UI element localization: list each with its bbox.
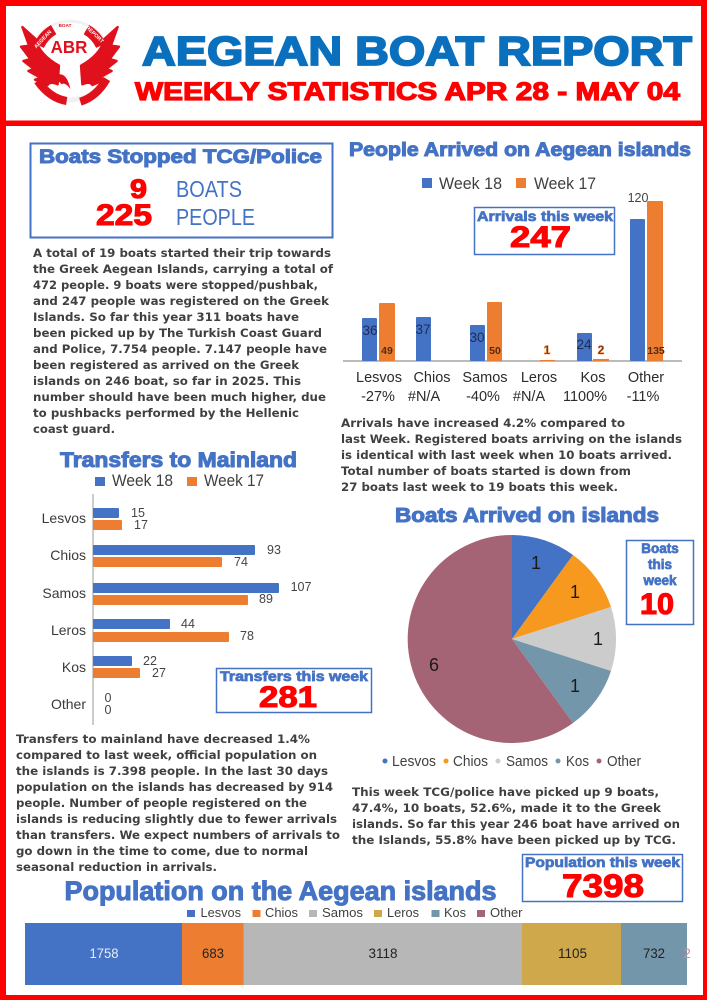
text block: boats commentary [352,785,680,847]
bars: Other: 0 [105,691,112,705]
text block: transfers commentary: go down in the time to come, due to normal [16,844,308,858]
bars: Samos: 107 [291,580,311,594]
bars: Kos: 24 [576,337,592,352]
bars: Samos: 30 [469,330,485,345]
icon: ABR eagle logo: REPORT [84,25,105,45]
bars: Samos: Samos [42,585,86,601]
axis labels: percent change: -27% [361,389,395,405]
callout: arrivals this week: 247 [510,221,571,254]
bars: Chios: 93 [267,543,281,557]
text block: trip summary [33,246,334,436]
bars: Lesvos: 17 [134,518,148,532]
stacked bar: population: 1758 [90,945,119,961]
bars: Other [51,691,112,717]
axis labels: percent change: #N/A [408,389,440,405]
axis labels: percent change [361,389,659,405]
callout: transfers this week: 281 [259,681,317,714]
legend: pie: Samos [506,754,548,770]
stacked bar: population: 1105 [558,945,587,961]
text block: trip summary: been registered as arrived on the Greek [33,358,299,372]
callout: boats this week: week [642,573,677,588]
callout: boats this week: 10 [640,588,674,621]
bars: Lesvos: 15 [131,506,145,520]
stacked bar: population: 732 [643,945,665,961]
legend: pie: Other [607,754,641,770]
stat: boats [130,174,242,204]
text block: arrivals commentary: is identical with last week when 10 boats arrived. [341,448,672,462]
callout: transfers this week [216,668,372,714]
text block: trip summary: and 247 people was registered on the Greek [33,294,329,308]
text block: boats commentary: This week TCG/police have picked up 9 boats, [352,785,659,799]
heading: people arrived: People Arrived on Aegean islands [349,140,691,161]
stacked bar: population: 2 [683,945,691,961]
subtitle: WEEKLY STATISTICS APR 28 - MAY 04 [135,78,680,106]
text block: trip summary: to pushbacks performed by the Hellenic [33,406,299,420]
text block: trip summary: A total of 19 boats started their trip towards [33,246,331,260]
callout: population this week [522,854,682,904]
legend: pie: Lesvos [392,754,436,770]
legend: arrivals [422,174,596,193]
bars: Chios: Chios [50,547,86,563]
header [21,20,692,106]
bars: Other [628,191,665,361]
slice values: 1 [570,582,580,602]
callout: transfers this week: Transfers this week [220,669,369,684]
callout: arrivals this week [474,208,614,254]
bars: Leros: 78 [240,629,254,643]
bars: Lesvos: 49 [381,345,393,357]
text block: transfers commentary: Transfers to mainland have decreased 1.4% [16,732,310,746]
text block: transfers commentary: compared to last week, official population on [16,748,317,762]
bars: Kos: Kos [62,659,86,675]
text block: trip summary: been picked up by The Turkish Coast Guard [33,326,322,340]
bars: Leros: 44 [181,617,195,631]
heading: boats stopped: Boats Stopped TCG/Police [39,147,322,168]
bars: Chios: 37 [415,322,431,337]
legend: transfers: Week 18 [112,471,173,490]
legend: population: Leros [387,905,419,920]
text block: transfers commentary: the islands is 7.398 people. In the last 30 days [16,764,328,778]
legend: population: Kos [444,905,466,920]
legend: pie: Chios [453,754,488,770]
text block: arrivals commentary: Total number of boats started is down from [341,464,631,478]
panel: boats stopped [30,144,332,238]
heading: boats arrived: Boats Arrived on islands [395,505,659,527]
icon: ABR eagle logo [21,20,119,102]
text block: arrivals commentary: last Week. Registered boats arriving on the islands [341,432,682,446]
bars: Leros [540,343,555,361]
axis labels: percent change: 1100% [563,389,607,405]
callout: boats this week [626,540,694,624]
bars: Chios [50,543,281,569]
legend: population: Lesvos [200,905,241,920]
text block: arrivals commentary: Arrivals have increased 4.2% compared to [341,416,625,430]
text block: boats commentary: the Islands, 55.8% have been picked up by TCG. [352,833,676,847]
callout: boats this week: Boats [641,541,679,556]
axis labels: percent change: #N/A [513,389,545,405]
text block: trip summary: the Greek Aegean Islands, carrying a total of [33,262,334,276]
text block: trip summary: islands on 246 boat, so far in 2025. This [33,374,301,388]
stat: people [96,199,255,232]
legend: transfers [95,471,264,490]
bars: Lesvos: 36 [362,323,378,338]
bars: Leros [51,617,254,643]
bars: Leros: 1 [544,343,551,357]
text block: arrivals commentary: 27 boats last week to 19 boats this week. [341,480,618,494]
axis labels: islands: Leros [521,370,557,386]
stat: boats: 9 [130,174,147,204]
text block: transfers commentary: than transfers. We expect numbers of arrivals to [16,828,340,842]
legend: arrivals: Week 18 [439,174,502,193]
axis labels: islands [356,370,664,386]
slice: Lesvos [512,535,573,639]
heading: population: Population on the Aegean islands [64,876,496,906]
slice: Other [408,535,573,743]
stat: people: PEOPLE [176,204,255,230]
axis labels: islands: Other [628,370,664,386]
bars: Samos: 50 [489,345,501,357]
bars: Other: 135 [647,345,665,357]
bars: Chios: 74 [234,555,248,569]
text block: boats commentary: 47.4%, 10 boats, 52.6%, made it to the Greek [352,801,661,815]
stat: boats: BOATS [176,176,242,202]
slice values: 1 [531,553,541,573]
heading: transfers: Transfers to Mainland [60,449,297,472]
bars: Kos [62,654,166,680]
text block: boats commentary: islands. So far this year 246 boat have arrived on [352,817,680,831]
title: AEGEAN BOAT REPORT [142,28,692,74]
legend: arrivals: Week 17 [534,174,596,193]
callout: boats this week: this [648,557,672,572]
callout: population this week: 7398 [562,868,644,904]
bars: Lesvos [42,506,148,532]
bars: Lesvos: Lesvos [42,510,86,526]
bars: Kos: 22 [143,654,157,668]
axis labels: percent change: -11% [627,389,659,405]
stat: people: 225 [96,199,152,232]
text block: trip summary: number should have been much higher, due [33,390,326,404]
legend: transfers: Week 17 [204,471,264,490]
bars: Kos [576,333,609,361]
legend: pie [382,754,641,770]
slice: Kos [512,639,611,723]
bars: Kos: 2 [598,343,605,357]
bars: Samos: 89 [259,592,273,606]
text block: transfers commentary: islands is reducing slightly due to fewer arrivals [16,812,337,826]
bars: Other: 120 [628,191,648,205]
text block: transfers commentary: seasonal reduction in arrivals. [16,860,217,874]
slice values: 6 [429,655,439,675]
bars: Leros: Leros [51,622,86,638]
text block: trip summary: Islands. So far this year 311 boats have [33,310,299,324]
bars: Other: Other [51,696,86,712]
axis labels: islands: Chios [413,370,451,386]
slice: Samos [512,607,616,671]
callout: population this week: Population this week [525,855,681,870]
legend: population [187,905,523,920]
axis labels: percent change: -40% [466,389,500,405]
legend: population: Samos [322,905,363,920]
legend: population: Other [490,905,523,920]
text block: transfers commentary: people. Number of people registered on the [16,796,307,810]
bars: Chios [415,317,431,361]
bars: Samos [469,302,502,361]
bars: Other: 0 [105,703,112,717]
bars: Kos: 27 [152,666,166,680]
slice values: 1 [570,676,580,696]
text block: transfers commentary: population on the islands has decreased by 914 [16,780,333,794]
text block: arrivals commentary [341,416,682,494]
legend: pie: Kos [566,754,589,770]
slice values [429,553,603,696]
stacked bar: population: 3118 [368,945,398,961]
text block: transfers commentary [16,732,340,874]
bar chart: transfers [42,471,311,725]
icon: ABR eagle logo: BOAT [59,23,72,28]
icon: ABR eagle logo: ABR [51,37,88,57]
axis labels: islands: Samos [462,370,508,386]
text block: trip summary: 472 people. 9 boats were stopped/pushbak, [33,278,318,292]
slice: Chios [512,555,611,639]
text block: trip summary: and Police, 7.754 people. 7.147 people have [33,342,327,356]
bar chart: arrivals [343,174,682,405]
axis labels: islands: Lesvos [356,370,402,386]
icon: ABR eagle logo: AEGEAN [33,29,53,50]
slice values: 1 [593,629,603,649]
pie chart: boats arrived [382,535,641,770]
text block: trip summary: coast guard. [33,422,115,436]
legend: population: Chios [265,905,298,920]
bars: Lesvos [362,303,395,361]
stacked bar: population [25,923,691,985]
callout: arrivals this week: Arrivals this week [477,209,614,224]
bars: Samos [42,580,311,606]
stacked bar: population: 683 [202,945,224,961]
axis labels: islands: Kos [580,370,606,386]
